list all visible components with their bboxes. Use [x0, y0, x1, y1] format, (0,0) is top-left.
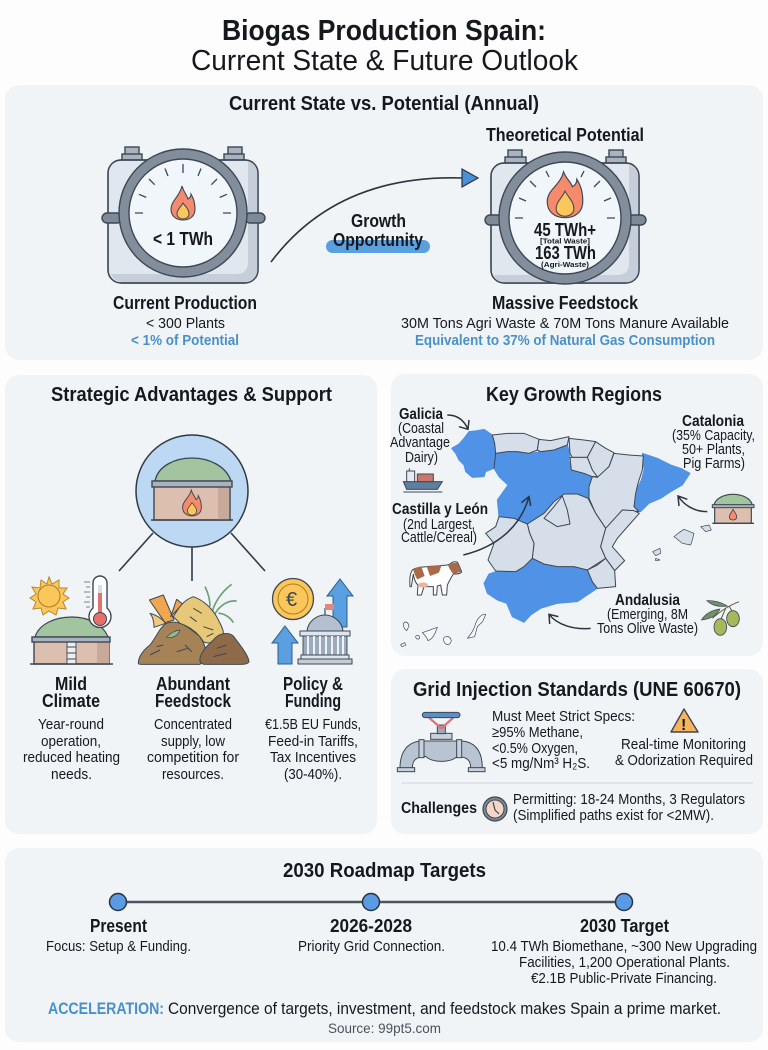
panel: roadmap	[5, 848, 763, 1042]
arrow: growth	[271, 169, 478, 262]
milestone: 2030 target	[491, 916, 757, 987]
panel: key growth regions	[390, 374, 763, 656]
label: Catalonia: Catalonia	[682, 413, 744, 430]
text block: mild climate: operation,	[41, 733, 101, 750]
text block: policy and funding: Feed-in Tariffs,	[268, 733, 358, 750]
icon: current production gas meter: < 1 TWh	[153, 229, 213, 249]
icon: cow	[410, 562, 462, 595]
text block: massive feedstock: Equivalent to 37% of Natural Gas Consumption	[415, 332, 715, 349]
label: Castilla y Leon: Cattle/Cereal)	[401, 530, 477, 546]
text block: policy and funding: Tax Incentives	[270, 749, 356, 766]
label: Catalonia: 50+ Plants,	[682, 442, 745, 458]
text block: policy and funding	[265, 674, 361, 783]
milestone: 2026-2028: 2026-2028	[330, 916, 412, 936]
text block: mild climate	[23, 674, 120, 783]
icon: abundant feedstock	[138, 584, 249, 664]
callout: growth opportunity: Opportunity	[333, 230, 423, 250]
milestone: 2030 target: Facilities, 1,200 Operational Plants.	[519, 954, 730, 971]
milestone: 2030 target: 2030 Target	[580, 916, 669, 936]
text block: current production: < 300 Plants	[146, 315, 225, 332]
text block: specs: Must Meet Strict Specs:	[492, 708, 635, 725]
label: Castilla y Leon	[392, 501, 488, 546]
text block: policy and funding: €1.5B EU Funds,	[265, 716, 361, 733]
text block: specs	[492, 708, 635, 772]
panel: grid injection standards	[391, 669, 763, 834]
text block: specs: <5 mg/Nm³ H₂S.	[492, 755, 590, 772]
text block: current production: < 1% of Potential	[131, 332, 239, 349]
label: Andalusia: Andalusia	[615, 592, 680, 609]
text block: current production	[113, 293, 257, 349]
label: Galicia: (Coastal	[398, 421, 444, 437]
milestone: present	[46, 916, 191, 955]
icon: warning: !	[681, 717, 686, 734]
icon: central digester	[136, 435, 248, 547]
text block: permitting: Permitting: 18-24 Months, 3 Regulators	[513, 791, 745, 808]
milestone: present: Present	[90, 916, 147, 936]
icon: mild climate	[30, 576, 113, 664]
icon: warning	[671, 709, 698, 734]
region: Basque Country	[569, 438, 596, 457]
text block: mild climate: reduced heating	[23, 749, 120, 766]
icon: theoretical potential gas meter: 45 TWh+	[534, 220, 596, 240]
text block: massive feedstock: Massive Feedstock	[492, 293, 639, 313]
panel: strategic advantages	[5, 375, 377, 834]
region: Catalonia	[634, 453, 690, 512]
text block: abundant feedstock: resources.	[162, 766, 224, 783]
icon: policy and funding: €	[286, 589, 297, 611]
label: Castilla y Leon: Castilla y León	[392, 501, 488, 518]
label: challenges: Challenges	[401, 800, 477, 817]
border: Galicia to Castilla y Leon	[494, 453, 496, 468]
region: Cantabria	[537, 437, 569, 452]
milestone: 2026-2028	[298, 916, 445, 955]
region: Extremadura	[486, 517, 534, 572]
region: Valencia	[601, 510, 639, 571]
heading: strategic advantages: Strategic Advantages & Support	[51, 384, 332, 406]
region: Aragon	[589, 453, 643, 528]
region: Castilla y Leon	[494, 445, 592, 524]
icon: olive branch	[701, 601, 739, 635]
region: Asturias	[492, 433, 539, 453]
Canary islands	[401, 614, 486, 647]
region: Andalusia	[484, 558, 597, 622]
text block: abundant feedstock	[147, 674, 239, 783]
text block: policy and funding: Funding	[285, 691, 341, 711]
title	[191, 15, 578, 77]
panel: current state vs potential	[5, 85, 763, 360]
icon: ship	[403, 468, 442, 492]
region: Madrid	[544, 496, 570, 527]
label: Catalonia: Pig Farms)	[683, 456, 745, 472]
arrows: map callouts	[447, 415, 707, 629]
icon: clock	[483, 797, 507, 821]
text block: specs: <0.5% Oxygen,	[492, 740, 578, 757]
icon: theoretical potential gas meter: 163 TWh	[535, 243, 596, 263]
text block: monitoring	[615, 736, 753, 769]
label: Galicia: Dairy)	[405, 450, 438, 466]
callout: acceleration: ACCELERATION:	[48, 999, 164, 1018]
icon: policy and funding	[272, 578, 353, 664]
icon: theoretical potential gas meter: (Agri-Waste)	[541, 260, 590, 269]
heading: roadmap: 2030 Roadmap Targets	[283, 860, 486, 882]
icon: current production gas meter	[102, 147, 265, 283]
callout: growth opportunity: Growth	[351, 211, 406, 231]
text block: mild climate: Year-round	[38, 716, 104, 733]
label: Andalusia: (Emerging, 8M	[607, 607, 688, 623]
text block: mild climate: needs.	[51, 766, 92, 783]
heading: grid injection: Grid Injection Standards (UNE 60670)	[413, 679, 741, 701]
milestone: present: Focus: Setup & Funding.	[46, 938, 191, 955]
milestone: 2026-2028: Priority Grid Connection.	[298, 938, 445, 955]
heading: key growth regions: Key Growth Regions	[486, 384, 662, 406]
region: Castilla-La Mancha	[527, 494, 606, 570]
text block: abundant feedstock: Abundant	[156, 674, 230, 694]
text block: policy and funding: Policy &	[283, 674, 343, 694]
heading: theoretical potential: Theoretical Potential	[486, 125, 644, 145]
text block: current production: Current Production	[113, 293, 257, 313]
text block: abundant feedstock: supply, low	[161, 733, 225, 750]
milestone: 2030 target: €2.1B Public-Private Financing.	[531, 970, 717, 987]
text block: massive feedstock	[401, 293, 729, 349]
title: Current State & Future Outlook	[191, 45, 578, 77]
text block: permitting: (Simplified paths exist for <2MW).	[513, 807, 714, 824]
region: La Rioja	[570, 457, 597, 477]
text block: abundant feedstock: Concentrated	[154, 716, 232, 733]
text block: abundant feedstock: competition for	[147, 749, 239, 766]
title: Biogas Production Spain:	[222, 15, 546, 47]
text block: mild climate: Climate	[42, 691, 100, 711]
region: Murcia	[587, 558, 616, 588]
icon: theoretical potential gas meter: [Total Waste]	[540, 236, 591, 246]
text block: monitoring: & Odorization Required	[615, 752, 753, 769]
label: Andalusia	[597, 592, 698, 637]
text block: massive feedstock: 30M Tons Agri Waste & 70M Tons Manure Available	[401, 315, 729, 332]
callout: growth opportunity	[326, 211, 430, 253]
region: Navarra	[587, 442, 614, 478]
text block: monitoring: Real-time Monitoring	[621, 736, 746, 753]
label: Catalonia: (35% Capacity,	[672, 428, 755, 444]
text block: permitting	[513, 791, 745, 824]
callout: acceleration: Convergence of targets, investment, and feedstock makes Spain a prime market.	[168, 999, 721, 1018]
text block: abundant feedstock: Feedstock	[155, 691, 232, 711]
source: Source: 99pt5.com	[328, 1020, 441, 1036]
label: Catalonia	[672, 413, 755, 472]
icon: theoretical potential gas meter	[485, 150, 646, 284]
label: Galicia: Galicia	[399, 406, 443, 423]
label: Galicia	[390, 406, 450, 466]
icon: small digester	[712, 494, 754, 523]
map: Spain regions	[401, 429, 711, 647]
text block: mild climate: Mild	[55, 674, 87, 694]
heading: current state: Current State vs. Potential (Annual)	[229, 93, 539, 115]
timeline	[110, 894, 632, 910]
text block: policy and funding: (30-40%).	[284, 766, 342, 783]
label: Galicia: Advantage	[390, 435, 450, 451]
label: Castilla y Leon: (2nd Largest,	[403, 517, 475, 533]
Balearic islands	[653, 525, 711, 561]
text block: specs: ≥95% Methane,	[492, 724, 583, 741]
region: Galicia	[452, 429, 496, 477]
icon: valve	[397, 712, 485, 772]
connector lines	[119, 533, 265, 581]
label: Andalusia: Tons Olive Waste)	[597, 621, 698, 637]
